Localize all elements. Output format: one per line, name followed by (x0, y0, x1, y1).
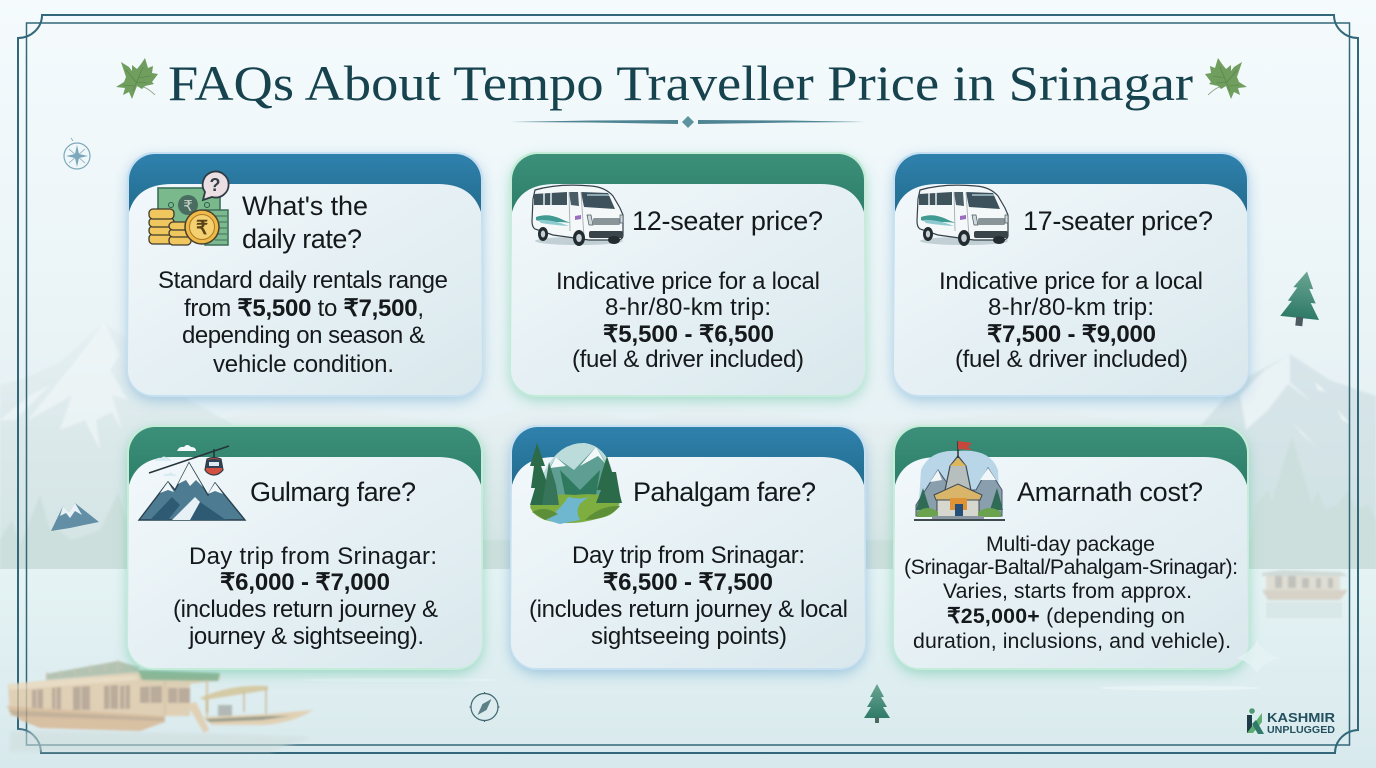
answer (904, 532, 1238, 653)
answer: journey & sightseeing). (188, 623, 424, 650)
left mountain (0, 322, 260, 570)
question: Amarnath cost? (1017, 477, 1203, 507)
answer: sightseeing points) (591, 623, 787, 650)
icon: compass bottom (470, 692, 500, 722)
icon: right maple leaf (1205, 58, 1247, 99)
answer: Standard daily rentals range (158, 267, 448, 294)
centre hills (130, 400, 1260, 570)
answer: ₹5,500 - ₹6,500 (603, 321, 774, 348)
answer: (Srinagar-Baltal/Pahalgam-Srinagar): (904, 555, 1238, 579)
right mountain (1130, 354, 1376, 570)
answer: (fuel & driver included) (572, 346, 804, 373)
answer: vehicle condition. (213, 351, 394, 378)
answer: ₹25,000+ (depending on (947, 604, 1185, 628)
title divider (510, 116, 866, 128)
icon: mountains and cable car (139, 445, 245, 520)
answer: ₹7,500 - ₹9,000 (987, 321, 1156, 348)
icon: money and coins: ₹ (196, 218, 208, 239)
answer: Day trip from Srinagar: (189, 543, 437, 570)
logo: Kashmir Unplugged (1247, 708, 1336, 736)
houseboat (6, 660, 220, 733)
question: Pahalgam fare? (633, 477, 816, 507)
answer: (includes return journey & (173, 596, 438, 623)
card: Pahalgam fare (510, 425, 866, 673)
answer: depending on season & (182, 322, 425, 349)
answer: (includes return journey & local (529, 596, 848, 623)
card: 17-seater price (893, 152, 1249, 400)
answer: Day trip from Srinagar: (572, 542, 805, 569)
card: daily rate (127, 152, 483, 400)
card: 12-seater price (510, 152, 866, 400)
icon: Pahalgam valley (530, 443, 622, 524)
icon: pine tree bottom (864, 684, 890, 723)
answer (939, 268, 1203, 373)
card: Amarnath cost (893, 425, 1249, 673)
answer (556, 268, 820, 373)
question: 17-seater price? (1023, 206, 1213, 236)
answer: ₹6,000 - ₹7,000 (220, 569, 390, 596)
question: 12-seater price? (632, 206, 823, 236)
icon: money and coins: ₹ (183, 198, 193, 215)
answer: Varies, starts from approx. (943, 579, 1192, 603)
houseboat reflection (10, 731, 312, 752)
answer: Indicative price for a local (556, 268, 820, 295)
icon: pine tree right (1279, 269, 1324, 328)
question: Gulmarg fare? (250, 477, 416, 507)
answer: Multi-day package (986, 532, 1155, 556)
forest silhouette band (0, 437, 1376, 570)
illustration: houseboat and shikara (6, 660, 313, 752)
question: What's the (242, 191, 368, 221)
icon: money and coins (149, 172, 229, 245)
shikara (200, 686, 313, 725)
icon: Amarnath temple (914, 441, 1005, 521)
answer: 8-hr/80-km trip: (605, 294, 771, 321)
answer: from ₹5,500 to ₹7,500, (184, 295, 424, 322)
decorative sparkle (1236, 640, 1280, 673)
answer (158, 267, 448, 378)
question (242, 191, 368, 254)
answer: ₹6,500 - ₹7,500 (603, 569, 773, 596)
answer: (fuel & driver included) (955, 346, 1188, 373)
lake (0, 569, 1376, 768)
icon: 12-seater van (532, 185, 623, 246)
icon: left maple leaf (116, 58, 158, 99)
logo: Kashmir Unplugged: UNPLUGGED (1267, 724, 1335, 736)
logo: Kashmir Unplugged: KASHMIR (1267, 710, 1336, 725)
answer: Indicative price for a local (939, 268, 1203, 295)
icon: compass rose top left (64, 138, 90, 169)
answer (529, 542, 848, 650)
answer: 8-hr/80-km trip: (988, 294, 1154, 321)
icon: small mountain left (51, 503, 99, 531)
icon: money and coins: ? (210, 175, 220, 195)
card: Gulmarg fare (127, 425, 483, 673)
heading text: FAQs About Tempo Traveller Price in Srinagar (168, 55, 1193, 111)
answer: duration, inclusions, and vehicle). (913, 629, 1231, 653)
question: daily rate? (242, 224, 362, 254)
icon: 17-seater van (917, 185, 1008, 246)
title (116, 55, 1247, 128)
answer (173, 543, 438, 650)
icon: faint houseboat right (1262, 570, 1348, 618)
